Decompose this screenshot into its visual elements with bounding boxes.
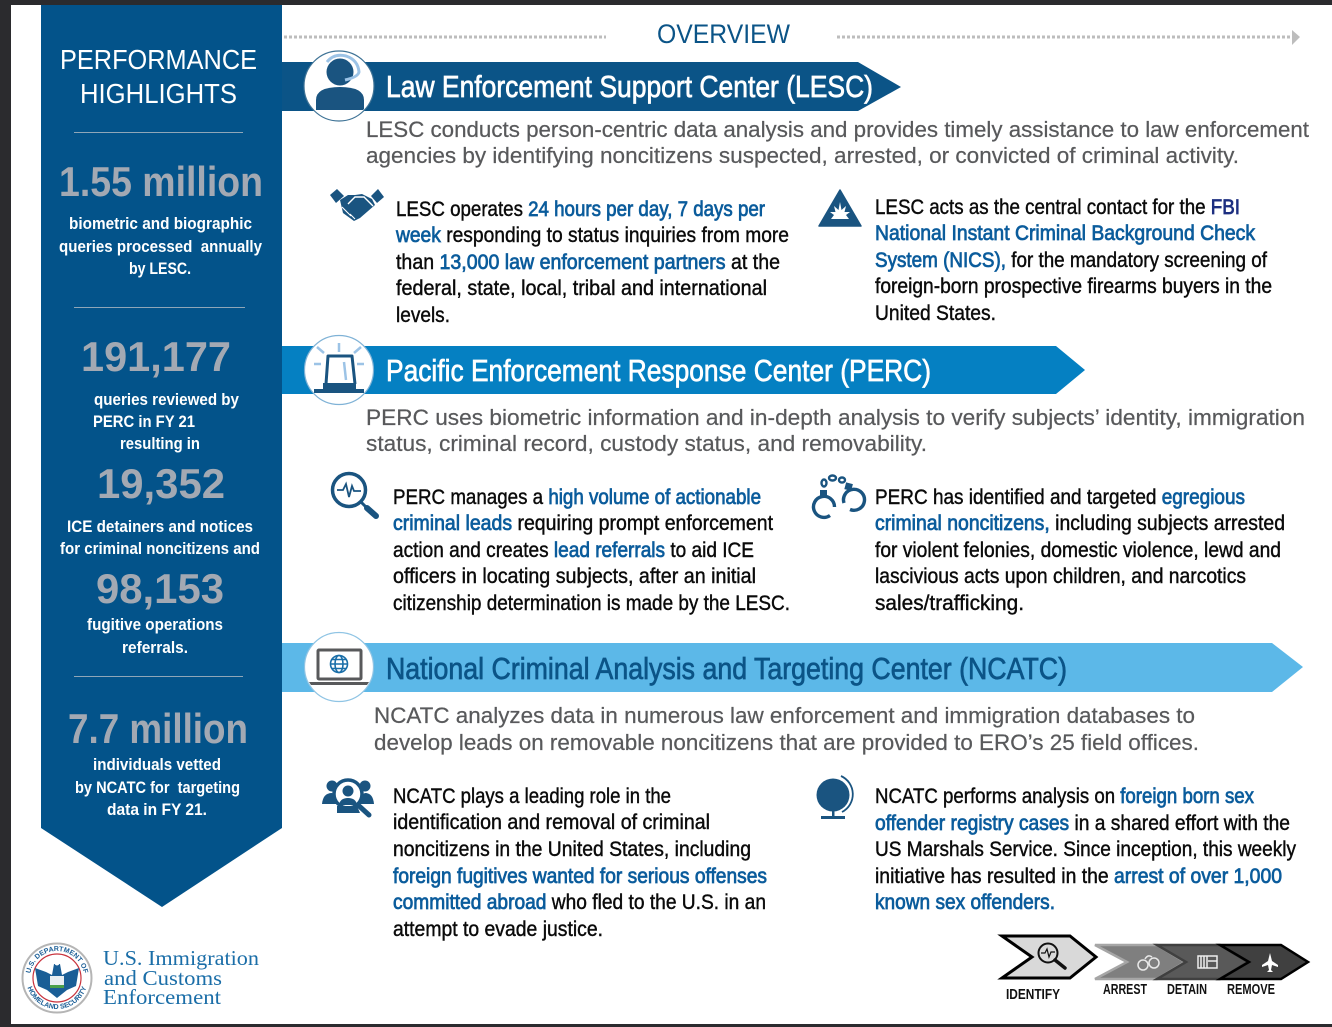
text: LESC operations: LESC operates 24 hours per day, 7 days per	[396, 197, 765, 221]
stat: 191,177: resulting in	[120, 434, 200, 453]
stat: 19,352: for criminal noncitizens and	[60, 539, 260, 558]
icon: person with headset	[304, 51, 374, 121]
logo: DHS seal: HOMELAND SECURITY	[28, 986, 86, 1009]
stat: 98,153: 98,153	[96, 565, 224, 612]
text: NCATC summary	[374, 703, 1199, 755]
icon: warning triangle with blast	[819, 190, 861, 226]
logo: agency name: Enforcement	[103, 985, 221, 1009]
stat: 7.7 million: data in FY 21.	[107, 800, 207, 819]
text: NCATC removal role: NCATC plays a leading role in the	[393, 784, 671, 808]
text: NCATC sex offender analysis: known sex offenders.	[875, 890, 1055, 914]
text: PERC summary: status, criminal record, custody status, and removability.	[366, 431, 927, 456]
text: LESC NICS contact	[875, 195, 1272, 325]
text: PERC summary	[366, 405, 1305, 456]
stat: 191,177: queries reviewed by	[94, 390, 239, 409]
text: PERC targets: for violent felonies, domestic violence, lewd and	[875, 538, 1281, 562]
text: PERC targets: sales/trafficking.	[875, 591, 1024, 615]
stat: 1.55 million: 1.55 million	[59, 158, 263, 205]
text: NCATC removal role: attempt to evade justice.	[393, 917, 603, 941]
stat: 191,177: PERC in FY 21	[93, 412, 195, 431]
text: PERC targets: lascivious acts upon children, and narcotics	[875, 564, 1246, 588]
banner: LESC: Law Enforcement Support Center (LESC)	[386, 69, 873, 104]
step: remove	[1220, 945, 1308, 998]
logo: agency name: U.S. Immigration	[103, 946, 260, 970]
step: identify	[1002, 936, 1096, 1003]
logo: DHS seal	[22, 942, 92, 1014]
text: PERC targets: PERC has identified and targeted egregious	[875, 485, 1245, 509]
icon: desk globe	[816, 776, 853, 819]
banner: PERC: Pacific Enforcement Response Center (PERC)	[386, 353, 931, 388]
step: arrest	[1095, 945, 1185, 998]
stat: 19,352	[60, 460, 260, 558]
text: NCATC removal role: foreign fugitives wanted for serious offenses	[393, 864, 767, 888]
text: PERC leads	[393, 485, 790, 615]
logo: agency name: and Customs	[104, 966, 222, 990]
text: NCATC sex offender analysis	[875, 784, 1296, 914]
text: NCATC summary: develop leads on removable noncitizens that are provided to ERO’s 25 field offices.	[374, 730, 1199, 755]
heading: performance highlights: HIGHLIGHTS	[80, 78, 237, 109]
text: LESC operations	[395, 197, 789, 327]
text: NCATC sex offender analysis: NCATC performs analysis on foreign born sex	[875, 784, 1254, 808]
logo: agency name	[103, 946, 260, 1009]
stat: 191,177: 191,177	[81, 333, 231, 380]
text: LESC summary: agencies by identifying noncitizens suspected, arrested, or convicted of criminal activity.	[366, 143, 1239, 168]
icon: people under magnifier	[322, 780, 374, 815]
text: LESC NICS contact: National Instant Criminal Background Check	[875, 221, 1255, 245]
icon: handcuffs	[814, 476, 864, 517]
step: detain	[1157, 945, 1248, 998]
text: NCATC removal role: noncitizens in the United States, including	[393, 837, 751, 861]
step: identify: IDENTIFY	[1006, 987, 1060, 1003]
step: arrest: ARREST	[1103, 982, 1147, 998]
text: LESC summary: LESC conducts person-centric data analysis and provides timely assistance to law enforcement	[366, 117, 1309, 142]
text: LESC operations: than 13,000 law enforcement partners at the	[396, 250, 780, 274]
stat: 1.55 million	[59, 158, 263, 278]
text: PERC leads: PERC manages a high volume of actionable	[393, 485, 761, 509]
icon: magnifier with pulse	[332, 474, 376, 516]
heading: overview with dotted rule	[284, 19, 1300, 49]
text: PERC targets: criminal noncitizens, including subjects arrested	[875, 511, 1285, 535]
icon: laptop with globe	[304, 632, 374, 702]
stat: 1.55 million: biometric and biographic	[69, 214, 252, 233]
stat: 7.7 million	[68, 705, 248, 819]
text: NCATC removal role	[393, 784, 767, 941]
banner: NCATC	[282, 643, 1303, 692]
process chevrons	[1002, 936, 1308, 1003]
stat: 98,153: referrals.	[122, 638, 188, 657]
logo: DHS seal: U.S. DEPARTMENT OF	[26, 946, 88, 973]
text: PERC leads: criminal leads requiring prompt enforcement	[393, 511, 773, 535]
icon: siren beacon	[304, 336, 374, 404]
text: PERC summary: PERC uses biometric information and in-depth analysis to verify subjects’ identity, immigration	[366, 405, 1305, 430]
stat: 7.7 million: individuals vetted	[93, 755, 221, 774]
text: PERC leads: citizenship determination is made by the LESC.	[393, 591, 790, 615]
stat: 98,153: fugitive operations	[87, 615, 223, 634]
text: LESC operations: levels.	[396, 303, 450, 327]
text: NCATC sex offender analysis: offender registry cases in a shared effort with the	[875, 811, 1290, 835]
heading: performance highlights: PERFORMANCE	[60, 44, 257, 75]
text: LESC summary	[366, 117, 1309, 168]
banner: NCATC: National Criminal Analysis and Targeting Center (NCATC)	[386, 651, 1067, 686]
icon: handshake	[330, 189, 384, 221]
stat: 7.7 million: 7.7 million	[68, 705, 248, 752]
text: NCATC removal role: identification and removal of criminal	[393, 810, 710, 834]
stat: 19,352: ICE detainers and notices	[67, 517, 253, 536]
text: NCATC sex offender analysis: initiative has resulted in the arrest of over 1,000	[875, 864, 1282, 888]
heading: overview with dotted rule: OVERVIEW	[657, 19, 790, 49]
text: PERC leads: officers in locating subjects, after an initial	[393, 564, 756, 588]
banner: LESC	[282, 62, 901, 111]
stat: 19,352: 19,352	[97, 460, 225, 507]
step: remove: REMOVE	[1227, 982, 1275, 998]
stat: 1.55 million: queries processed annually	[59, 237, 262, 256]
text: LESC operations: week responding to status inquiries from more	[395, 223, 789, 247]
stat: 7.7 million: by NCATC for targeting	[75, 778, 240, 797]
text: PERC leads: action and creates lead referrals to aid ICE	[393, 538, 754, 562]
text: LESC NICS contact: foreign-born prospective firearms buyers in the	[875, 274, 1272, 298]
stat: 191,177	[81, 333, 239, 453]
text: LESC NICS contact: System (NICS), for the mandatory screening of	[875, 248, 1267, 272]
banner: PERC	[282, 346, 1085, 394]
text: NCATC removal role: committed abroad who fled to the U.S. in an	[393, 890, 766, 914]
text: LESC NICS contact: United States.	[875, 301, 996, 325]
panel: performance highlights sidebar	[41, 5, 282, 907]
stat: 98,153	[87, 565, 224, 657]
text: LESC operations: federal, state, local, tribal and international	[396, 276, 767, 300]
stat: 1.55 million: by LESC.	[129, 259, 191, 278]
text: NCATC summary: NCATC analyzes data in numerous law enforcement and immigration databases to	[374, 703, 1195, 728]
step: detain: DETAIN	[1167, 982, 1207, 998]
heading: performance highlights	[60, 44, 257, 109]
text: LESC NICS contact: LESC acts as the central contact for the FBI	[875, 195, 1240, 219]
text: PERC targets	[875, 485, 1285, 615]
